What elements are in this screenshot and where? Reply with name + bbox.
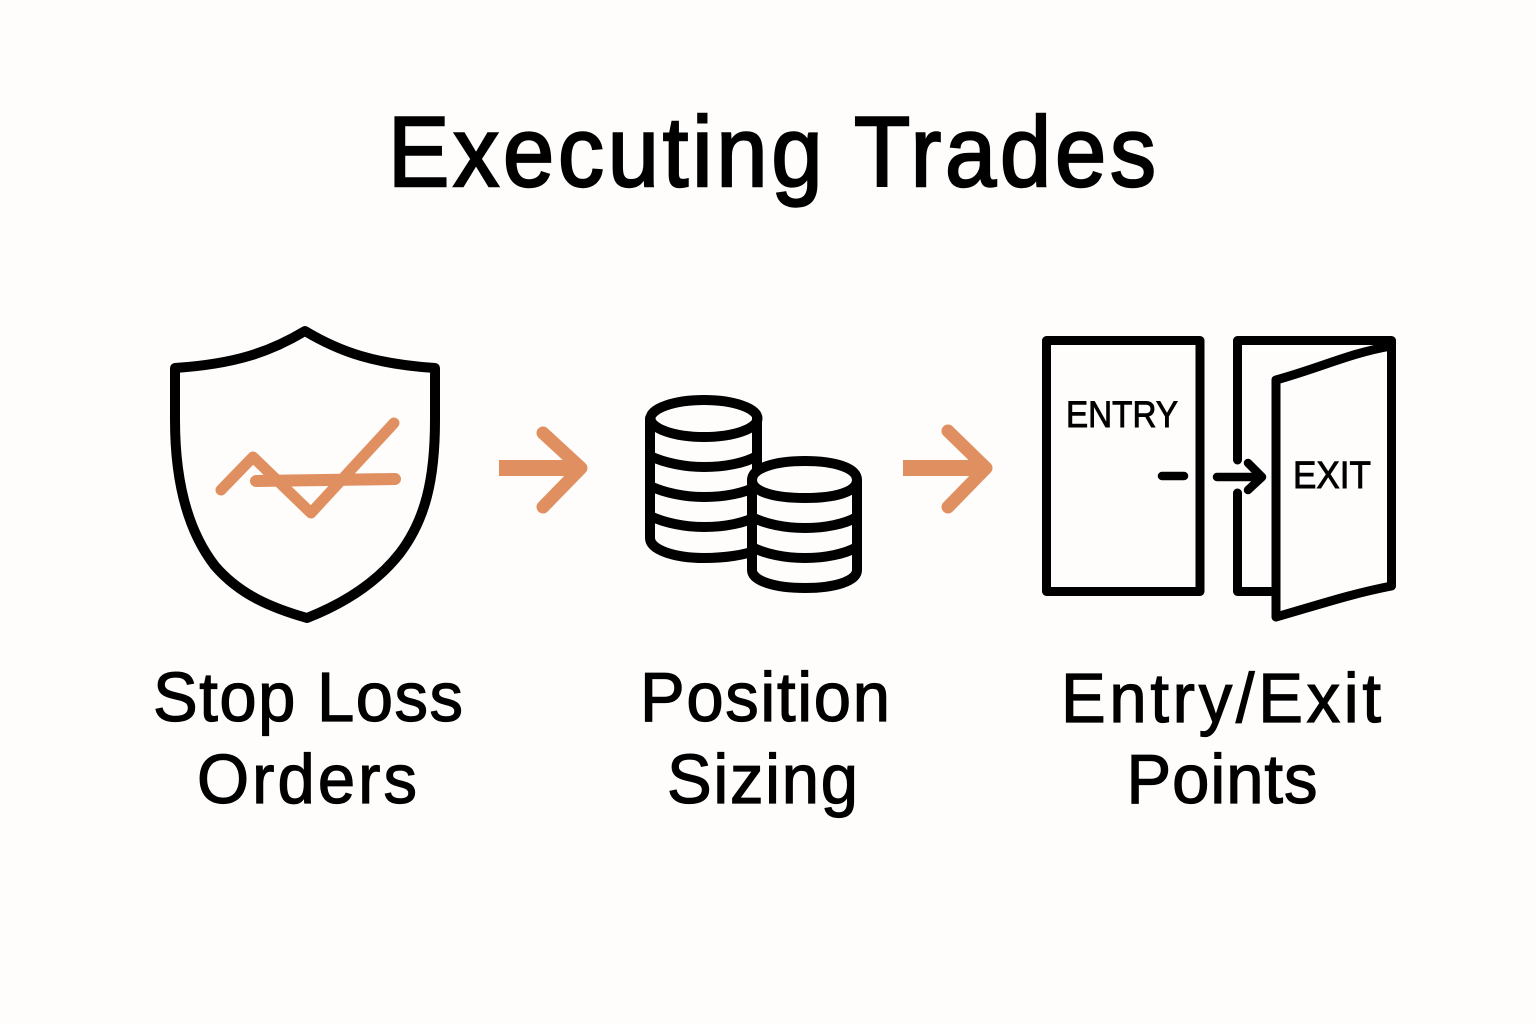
label: stop loss orders [153, 659, 463, 818]
icon: entry door [1046, 340, 1200, 592]
label: entry/exit points [1061, 660, 1381, 818]
label: position sizing [640, 659, 890, 818]
icon: shield with chart [175, 331, 435, 618]
label: stop loss orders: Stop Loss [153, 659, 463, 736]
title: Executing Trades [388, 97, 1156, 208]
arrow: stop loss to position sizing [499, 433, 581, 507]
icon: exit door: EXIT [1293, 455, 1371, 497]
label: stop loss orders: Orders [197, 741, 417, 818]
arrow: position sizing to entry/exit [903, 431, 986, 507]
icon: coin stacks [650, 400, 857, 588]
icon: exit door [1217, 340, 1392, 617]
label: position sizing: Sizing [667, 741, 858, 818]
label: entry/exit points: Points [1126, 741, 1318, 818]
label: position sizing: Position [640, 659, 890, 736]
label: entry/exit points: Entry/Exit [1061, 660, 1381, 737]
icon: entry door: ENTRY [1066, 394, 1178, 435]
